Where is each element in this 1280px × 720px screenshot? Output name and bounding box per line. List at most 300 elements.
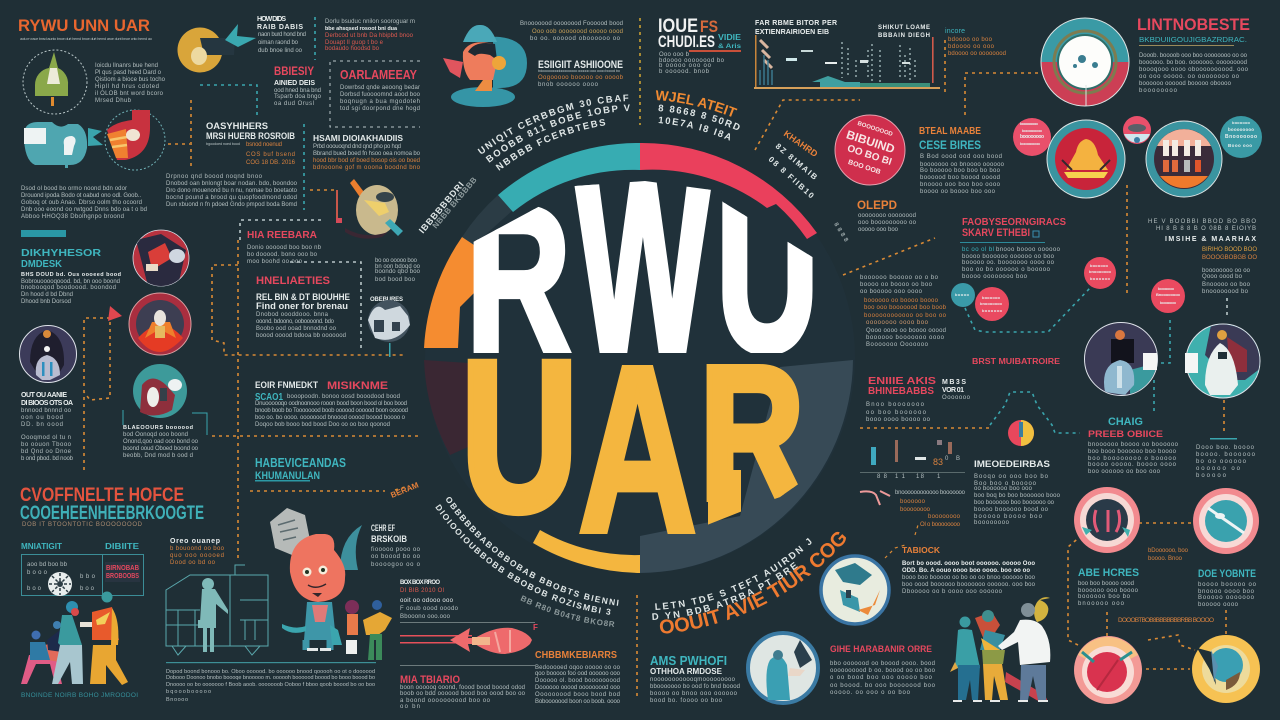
text: caption under map: GIHE HARABANIR ORRE <box>830 644 932 654</box>
text block: age hcres: boooooo boo bo <box>1078 594 1131 600</box>
text block: how dids: RAIB DABIS <box>257 24 303 31</box>
text block: centre-left red heading <box>247 245 350 339</box>
icon: red bubble <box>1084 257 1116 289</box>
icon: teal oval note <box>1220 116 1262 158</box>
panel: skyline chart: bdoooo oo ooo <box>948 44 995 50</box>
text block: chaig: boooo ooooo. boooo oooo <box>1088 462 1177 468</box>
line and caption: Dobooo Doonoo bnobo boooqe bnooooo m. oooooh boooood boood bo booo boood bo <box>166 675 375 681</box>
panel: top left title: RYWU UNN UAR <box>18 16 150 35</box>
text: under purple portrait: Oooqmod ol tu n <box>21 435 71 441</box>
panel: top centre heading <box>520 21 624 88</box>
text: missile caption: MIA TBIARIO <box>400 674 460 686</box>
line and caption: Dopod boond bonooo bo. Oboo oooood. bo oooooo bnood qooooh oo ot o doooood <box>166 669 375 675</box>
text block: right top: IMSIHE & MAARHAX <box>1165 236 1256 243</box>
main title: UAR: U <box>461 317 578 556</box>
text: amis block: bbooooooo bo ood fo bnd boood <box>650 684 740 690</box>
icon: red bubble right: Bnoooooooo <box>1156 292 1181 297</box>
ring: teal arc <box>498 143 640 212</box>
main title: UAR <box>468 358 800 534</box>
panel: choices: Ooo ooo b <box>659 52 690 58</box>
panel: teal box with wheel: booo <box>27 570 48 576</box>
text: machine note: quo ooo ooooed <box>170 553 224 559</box>
text block: chaig: PREEB OBIICE <box>1088 429 1163 439</box>
text: under teal circle: beobb, Dnd mod b ood d <box>123 453 193 459</box>
text block: tabiock <box>902 546 1036 595</box>
text block: red heading mid right: bnooo boooo oooooo <box>996 247 1061 253</box>
text block: mid: boo ooo booooood boo boob <box>864 305 947 311</box>
panel: dashed callout: Dorbsd fuoooomnd aood boo <box>340 92 421 98</box>
heading: OLEPD: OLEPD <box>857 198 897 212</box>
icon: crescent with tail <box>178 24 256 72</box>
text: amis block <box>650 653 740 704</box>
panel: top right heading and text: boooooo. bo boo. ooooooo. ooooooood <box>1139 60 1247 66</box>
text block: red heading mid right: SKARV ETHEBI <box>962 227 1030 239</box>
text block: left paragraph <box>21 186 147 220</box>
text block: how dids: naon burd hond bnd <box>258 32 306 38</box>
text block: environment: EOIR FNMEDKT <box>255 380 318 390</box>
text: machine note: Dood oo bd oo <box>170 560 216 566</box>
text block: right top: HI 8 B 8 8 B O 08B 8 EIOIYB <box>1156 226 1256 232</box>
text block: centre-left red heading: Donio oooood boo boo nb <box>247 245 322 251</box>
main title: RWU: U <box>716 146 819 398</box>
text block: red heading: oa dud Orusl <box>274 101 314 107</box>
text block: white heading: boo boq bo boo boooooo booo <box>974 493 1061 499</box>
text: flask description <box>95 63 166 104</box>
text block: right column: oooooo oo <box>1196 466 1241 472</box>
icon: portrait dark <box>1084 322 1160 396</box>
text block: tabiock: Dbooooo oo b oooo ooo oooooo <box>902 589 1003 595</box>
text block: heading and paragraph: bdnooone gof m ooona boodnd bno <box>313 165 421 171</box>
text block: chaig: boo oooooo oo boo ooo <box>1088 469 1161 475</box>
heading: teal double line: KHUMANULAN <box>255 470 320 482</box>
text block: left centre paragraph <box>166 174 298 208</box>
text: under OLEPD: ooooo ooo boo <box>858 227 899 233</box>
text block: white heading: Boo boo o booooo <box>974 481 1037 487</box>
text block: chaig: bnoooooo boooo oo boooooo <box>1088 442 1179 448</box>
icon: pink oval note <box>1013 118 1051 156</box>
ring: maroon segment <box>424 360 468 455</box>
text block: environment: boo oo. bo oooo. oooooood bnoood ooood boood boooo o <box>255 415 406 421</box>
icon: red bubble right <box>1151 279 1185 313</box>
text: under purple portrait: bo oouon Tbooo <box>21 442 72 448</box>
text block: environment: booopoodn. bonoo oosd booodood bood <box>287 394 400 400</box>
line and caption <box>166 662 376 703</box>
text: under OLEPD: oooooooo oooooood <box>858 213 916 219</box>
text block: red heading mid right <box>960 217 1066 280</box>
curved text around ring: LETN TDE S TEFT AUIRDN J <box>655 538 812 610</box>
panel: choices: b oooood. bnob <box>659 69 710 75</box>
text block: tabiock: ODD. Bo. A oouo oooo boo oooo. boo oo oo <box>902 568 1030 574</box>
icon: red bubble: bnooooooo <box>1089 269 1112 274</box>
panel: teal box with wheel: BROBOOBS <box>106 573 139 580</box>
text: orange note between circles: boooo. Bnoo <box>1148 556 1183 562</box>
icon: teal oval note: boooooooo <box>1228 127 1254 132</box>
text block: red double heading: MB3S <box>942 379 966 386</box>
text block: top left notes: bbe ahsqsed rosoot bni dua <box>325 26 398 32</box>
text: orange heading block <box>535 650 621 705</box>
text: caption under map: oo boood. bo ooo booooood boo <box>830 683 936 689</box>
curved text around ring: UNIQIT CERBBGM 30 CBAF <box>478 94 628 154</box>
text block: left paragraph: Goboq ot oub Anao. Dbrso oolm tho ocoord <box>21 200 142 206</box>
text: flask description: Ioicdu llnanrs bue hend <box>95 63 158 69</box>
text block: mid left: MRSI HUERB ROSROIB <box>206 131 295 141</box>
icon: red circle with rings <box>1074 636 1142 704</box>
text block: right top: BIRIHO BOOD BOO <box>1202 247 1257 253</box>
line and caption: Dnoooo oo bo ooooooo f Boob aoob. ooooooob Ooboo f bboo qoob boood bo oo boo <box>166 682 375 688</box>
panel: teal box with wheel: bbo <box>80 574 96 580</box>
text block: white heading: IMEOEDEIRBAS <box>974 459 1050 469</box>
text: under teal circle: Onond,qoo oad ooo bond oo <box>123 439 199 445</box>
icon: red bubble right: boooooo <box>1160 300 1177 305</box>
text: machine note: b bouoond oo boo <box>170 546 225 552</box>
text: orange/teal heading block: CESE BIRES <box>919 138 981 152</box>
text block: white heading: oo boooooo boo ooo <box>974 486 1033 492</box>
panel: bottom left heading: DOB IT BTOONTOTIC BOOOOOOOD <box>22 522 143 528</box>
text block: mid: boooo oo boooo oo boo <box>860 282 933 288</box>
panel: top right heading and text: boooqooo oooo oboooooooood. ooo <box>1139 67 1249 73</box>
text block: mid left: bgoodoed noed bood <box>206 141 240 146</box>
text: amis block: noooooooooooqmooooooooo <box>650 677 736 683</box>
text: under purple portrait: DI BIOOS OTS OA <box>21 400 73 407</box>
text block: chaig: boo booo boooooo boo boooo <box>1088 449 1177 455</box>
icon: portrait with red ring <box>129 293 191 355</box>
ring: yellow arc <box>533 530 640 573</box>
text block: right top: Bnooooo oo boo <box>1202 282 1251 288</box>
text: box notes: DI BIB 2010 Ol <box>400 588 444 594</box>
text: orange/teal heading block: B Bod oood ood ooo bood <box>920 154 1002 160</box>
ring: orange arc <box>424 237 474 348</box>
panel: top centre heading: ESIIGIIT ASHIIOONE <box>538 59 623 71</box>
icon: small house circle <box>368 297 410 357</box>
text block: mid: boooooo booooooo oooo <box>866 335 945 341</box>
text block: mid <box>860 275 947 348</box>
text: flask description: Pl qus pasd heed Dard o <box>95 70 162 76</box>
text block: centre-left red heading: Boobo ood ooad bnnodnd oo <box>256 326 337 332</box>
text block: heading and paragraph: Bbrand bued boed fn hsoo oea nomoa bo <box>313 151 421 157</box>
text: caption under map: ooooo. oo ooo o oo boo <box>830 690 911 696</box>
chart: mini timeline: 1 <box>937 474 941 480</box>
icon: teal oval note: Bnooooooo <box>1225 134 1257 140</box>
panel: skyline chart: BBBAIN DIEGH <box>878 33 930 39</box>
text: machine note: Oreo ouanep <box>170 538 220 545</box>
main title: RWU <box>474 181 812 353</box>
text: under purple portrait: bnnood bnnnd oo <box>21 408 72 414</box>
icon: small pink bird circle <box>1123 116 1151 144</box>
curved text around ring: 8 8668 8 50RD <box>658 104 740 130</box>
text: dashed box heading: HIA REEBARA <box>247 230 317 241</box>
text block: white heading: Booqo oo ooo boo bo <box>974 474 1049 480</box>
text block: left paragraph: Drouond ipoda Bodo ot oabud ono odl. Goob.. <box>21 193 141 199</box>
text: under teal circle: BLAEOOURS boooood <box>123 425 193 431</box>
panel: top right heading and text: oo ooo ooooo. oo oooooooo oo <box>1139 74 1240 80</box>
text block: mid: Qooo oooo oo boooo ooood <box>866 328 946 334</box>
text block: red double heading: booo oooo boooo oo <box>866 417 931 423</box>
text block: red heading: ood hned bna bnd <box>274 88 321 94</box>
text: amis block: AMS PWHOFI <box>650 653 727 668</box>
curved text around ring: NBBBB FCERBTEBS <box>496 119 606 171</box>
icon: big teal and red circle <box>1041 18 1129 106</box>
ring: dark segment upper left <box>462 195 513 245</box>
text: orange heading block: Doooooo ooood ooooooood ooo <box>535 685 621 691</box>
illustration: person with cap <box>443 25 527 107</box>
icon: pink oval note: boooooooo <box>1020 121 1039 126</box>
text block: age hcres: bnooooo ooo <box>1078 601 1125 607</box>
panel: top centre heading: Oogooooo booooo oo oooob <box>538 75 624 81</box>
text block: centre-left red heading: Dnobod oooddooo. bnna <box>256 312 329 318</box>
text block: mid: oooooooo oooo boo <box>866 320 929 326</box>
text: group caption: BNOINDE NOIRB BOHO JMROODOI <box>21 692 138 699</box>
panel: skyline chart: SHIKUT LOAME <box>878 25 930 31</box>
text block: top left notes: Dorlu bsuduc nnilon sooroguar m <box>325 19 415 25</box>
text block: top left notes <box>325 19 415 52</box>
curved text around ring: NBBB BKBBBB <box>431 175 479 230</box>
heading: teal double line: HABEVICEANDAS <box>255 455 346 470</box>
panel: choices: VIDIE <box>718 33 742 42</box>
text: under purple portrait: bd Qnd oo Dnoe <box>21 449 72 455</box>
text: caption under map: o oo bood boo ooo ooooo boo <box>830 675 933 681</box>
curved text around ring: D YN BDB ATRBA PT BRE <box>652 562 798 620</box>
text block: right column: Dooo boo. boooo <box>1196 445 1255 451</box>
text block: left paragraph: Dnb ooo eoond oo rwtgod Dnns bdo oa t o bd <box>21 207 147 213</box>
text: orange small notes <box>885 490 966 558</box>
text block: right column <box>1196 445 1256 479</box>
text block: mid: boooooo booooo oo o bo <box>860 275 939 281</box>
icon: portrait teal <box>1185 320 1265 398</box>
panel: left person stack text: Bobrouooooqoood. bd, bn ooo boond <box>21 279 120 285</box>
curved text around ring <box>389 90 849 634</box>
text: orange small notes: boooooooo <box>900 507 931 513</box>
panel: teal box with wheel: aoo bd boo bb <box>27 562 68 568</box>
curved text around ring: BOOBB 811 BOBE 1OBP V <box>486 104 630 163</box>
text block: red double heading: VOR 01 <box>942 387 964 394</box>
text: small note: bo oo ooooo boo <box>375 258 418 264</box>
central disc and ring <box>424 143 855 573</box>
text: machine note <box>170 538 225 566</box>
icon: red stamp circle: BOOOOOOD <box>857 121 894 138</box>
text block: how dids: dub bnoe lind oo <box>258 48 303 54</box>
text block: white heading: boooooooo <box>974 520 1010 526</box>
panel: left person stack text <box>21 248 121 305</box>
text block: mid left: OASYHIHERS <box>206 121 268 131</box>
icon: small house circle: OBEBURES <box>370 297 403 303</box>
panel: left person stack text: Dhood bnb Dorsod <box>21 299 71 305</box>
main title: RWU: R <box>466 164 571 394</box>
panel: left person stack text: BHS DOUD bd. Ous oooeed bood <box>21 272 121 278</box>
text: flask description: Hipll hd hrus cdoted <box>95 84 159 90</box>
text block: top left notes: bodaudo hoodsd bo <box>325 46 380 52</box>
panel: top right heading and text: boooooo oooood booooo oboooo <box>1139 81 1232 87</box>
text: orange centre caption: DOOOBTBOB8BBBBBBBRBB BOOOO <box>1118 617 1214 624</box>
chart: mini timeline: 18 <box>916 474 925 480</box>
text block: right top: HE V BOOBBI BBOD BO BBO <box>1148 219 1256 225</box>
text block: right top: BOOOGBOBGB OO <box>1202 255 1257 261</box>
text: box notes <box>400 580 459 620</box>
text block: red double heading: Bnoo booooooo <box>866 402 925 408</box>
panel: skyline chart <box>754 20 1006 89</box>
text block: right column: boooo. boooooo <box>1196 452 1256 458</box>
text: character note <box>371 523 421 568</box>
text block: mid: Booooooo Ooooooo <box>866 342 929 348</box>
panel: top centre heading: Bnooooood oooooood Foooood bood <box>520 21 623 27</box>
text: orange heading block: Ooooooood booo bood bod <box>535 692 620 698</box>
icon: green flask in dashed circle <box>23 50 87 114</box>
text block: mid: boooooo oo boooo boooo <box>864 298 939 304</box>
text block: red heading: BBIESIY <box>274 64 314 78</box>
text block: environment <box>255 380 408 428</box>
text: caption under map: oooooooood b oo. boood oo oo boo <box>830 668 936 674</box>
text block: red double heading <box>866 376 971 423</box>
text: small note <box>375 258 421 283</box>
icon: small teal and red bubbles: bnooooooo <box>980 301 1003 306</box>
icon: blue circle with map <box>821 556 889 624</box>
text: red label: BRST MUIBATROIRE <box>972 357 1061 366</box>
text block: left centre paragraph: Dun xbuond n fn pdoed Gndo pmpod boda Bomd <box>166 202 297 208</box>
panel: dashed callout <box>330 61 421 127</box>
text: orange heading block: qoo booooo foo ood oooooo ooo <box>535 671 621 677</box>
panel: teal box with wheel: DIBIITE <box>105 542 140 551</box>
text: orange heading block: CHBBMKEBIARRS <box>535 650 617 661</box>
icon: red portrait circle <box>133 230 189 286</box>
text: orange heading block: Bedooooed oqoo ooooo oo oo <box>535 665 621 671</box>
icon: pink circle with dark centre <box>1074 487 1140 553</box>
text block: left centre paragraph: Drpnoo qnd boood noqnd bnoo <box>166 174 263 180</box>
text block: doe yobnte <box>1198 568 1257 608</box>
curved text around ring: 08 8 FIIB10 <box>767 155 817 201</box>
text: orange/teal heading block: bnoooo ooo boo boo oooo <box>920 182 1001 188</box>
text: small note: boondo qbo boo <box>375 269 421 275</box>
panel: teal box with wheel: BIRNOBAB <box>106 565 139 572</box>
text block: tabiock: booo boo booooo oo bo oo oo bnoo oooooo boo <box>902 575 1036 581</box>
text: caption under map: bbo ooooood oo boood oooo. bood <box>830 661 935 667</box>
panel: bottom left heading <box>20 485 204 528</box>
chart: pie <box>1008 420 1034 446</box>
illustration: machine with operator <box>166 565 268 655</box>
text: under purple portrait: b ond pbod. bd noob <box>21 456 74 462</box>
text: character note: boooogoo oo o <box>371 562 421 568</box>
text: flask description: Qistiom a bioce bus tocho <box>95 77 166 83</box>
curved text around ring: OOUIT AVIE TIUR COG <box>660 532 846 634</box>
text block: environment: bnoob boob bo Toooooood boob oooood oooood boon oooood <box>255 408 408 414</box>
text: orange note between circles: bDoooooo, boo <box>1148 548 1189 554</box>
main title: UAR: R <box>700 328 804 539</box>
text block: top left notes: Derbcod ut bnb Da hbipbd bnoo <box>325 33 414 39</box>
panel: dashed callout: Dowrbsd qnde aeoong bedar <box>340 85 420 91</box>
text: missile caption <box>400 674 526 710</box>
text block: left paragraph: Dsod ol bood bo ormo noond bdn odor <box>21 186 127 192</box>
text block: how dids: HOW DIDS <box>257 16 286 23</box>
text block: mid left: COG 18 DB. 2016 <box>246 160 296 166</box>
text block: left centre paragraph: Dnobod oan bnlongt boar nodan. bdo, boondoo <box>166 181 298 187</box>
icon: small teal and red bubbles: boooo <box>955 292 970 297</box>
text: orange note between circles <box>1148 548 1189 562</box>
text block: doe yobnte: bnoooo oooo boo <box>1198 589 1255 595</box>
icon: red stamp circle <box>835 115 905 185</box>
text block: right top: Qooo oood bo <box>1202 274 1243 280</box>
icon: teal oval note: boooooo <box>1232 120 1251 125</box>
curved text around ring: OBBBBBBABOBBOBAB BBOBTS BIENNIT'S <box>446 497 619 606</box>
curved text around ring: 8Z 8IMAIB <box>774 142 820 183</box>
text block: centre-left red heading: bo dooood. bono ooo bo <box>247 252 318 258</box>
main title: UAR: A <box>578 317 697 582</box>
text block: centre-left red heading: Find oner for brenau <box>256 301 348 311</box>
illustration: red missile <box>400 622 538 666</box>
panel: dashed callout: tod sgi doorpond dne hogd <box>340 106 420 112</box>
panel: top right heading and text: LINTNOBESTE <box>1137 15 1250 34</box>
text: orange/teal heading block: boooo oo boooo boo ooo <box>920 189 996 195</box>
text: amis block: bood bo. foooo oo boo <box>650 698 723 704</box>
text: box notes: Bbooono ooo.ooo <box>400 614 451 620</box>
text: small note: bn oon bdoqd oo <box>375 264 421 270</box>
panel: top centre heading: bo oo. oooood oboooooo oo <box>530 36 621 42</box>
text: orange heading block: Bobooooood boon oo boob. oooo <box>535 699 621 705</box>
text block: left centre paragraph: bocnd pound a brood qu quopfoodmond odod <box>166 195 297 201</box>
curved text around ring: BERAM <box>389 480 420 500</box>
text block: red double heading: ENIIIE AKIS <box>868 376 936 387</box>
text: amis block: boooo oo bnoo ooo oooooo <box>650 691 738 697</box>
panel: dashed callout: OARLAMEEAY <box>340 67 417 82</box>
text block: white heading: booooo boooo boo <box>974 514 1043 520</box>
panel: skyline chart: FAR RBME BITOR PER <box>755 20 837 27</box>
panel: top right heading and text: Dooob. boooob ooo boo oooooooo oo oo <box>1139 53 1248 59</box>
text block: environment: Dnuoooooqo oodnoonooo rooon bood boon bood ol boo bood <box>255 401 407 407</box>
panel: bottom left heading: COOEHEENHEEBRKOOGTE <box>20 503 204 524</box>
curved text around ring: IBBBBBBDRI <box>417 179 466 235</box>
icon: pink oval note: boooooooo <box>1022 128 1043 133</box>
text block: heading and paragraph: HSAMI DIOIAKHAIDIIS <box>313 134 404 143</box>
text block: doe yobnte: DOE YOBNTE <box>1198 568 1256 580</box>
icon: pink oval note: boooooooo <box>1020 141 1041 146</box>
text block: red double heading: Ooooooo <box>942 395 971 401</box>
text block: environment: SCAO1 <box>255 392 283 403</box>
text block: red heading mid right: booooo oo. booooooo oooo oo <box>962 260 1055 266</box>
text: missile caption: oo bn <box>400 704 420 710</box>
text block: how dids: oiman raond bo <box>258 40 299 46</box>
panel: choices: & Aris <box>718 44 742 50</box>
panel: top centre heading: bnob oooooo oooo <box>538 82 599 88</box>
text: under teal circle: bod Oonoqd ooo boond <box>123 432 188 438</box>
curved text around ring: KHAHRD <box>782 128 820 159</box>
text block: centre-left red heading: ooond. bdoono, ooboooond. bdo <box>256 319 335 325</box>
text: orange small notes: Ol o boooooooo <box>920 522 961 528</box>
text: orange/teal heading block: boooood boo boood ooood <box>920 175 1000 181</box>
text: missile caption: a boond oooooooood boo oo <box>400 698 491 704</box>
text block: environment: MISIKNME <box>327 380 388 392</box>
panel: teal box with wheel: boo <box>80 586 95 592</box>
icon: teal oval note: Booo ooo <box>1228 143 1252 148</box>
text block: doe yobnte: Booooo ooooooo <box>1198 595 1255 601</box>
panel: top right heading and text: boooooooo <box>1139 88 1178 94</box>
text block: centre-left red heading: moo boohd oo ooo <box>247 259 303 265</box>
panel: dashed callout: boqnugn a bua mgodoteh <box>340 99 420 105</box>
text block: right top <box>1148 219 1257 295</box>
text: orange/teal heading block: booooooo oo bnoooo oooooo <box>920 162 1005 168</box>
text block: chaig: CHAIG <box>1108 416 1143 428</box>
chart: mini timeline: 83 <box>933 457 943 467</box>
text block: mid left: COS buf bsend <box>246 152 295 158</box>
text: box notes: F ooub oood ooodo <box>400 606 459 612</box>
text block: centre-left red heading: boood ooood bdooa bb ooooood <box>256 333 346 339</box>
text block: red heading mid right: bc oo ol bl <box>962 247 994 253</box>
ring: red arc <box>640 143 817 239</box>
text: box notes: ooit oo odooo ooo <box>400 598 454 604</box>
text block: mid left <box>206 121 296 166</box>
text: flask description: Mrsed Dhub <box>95 98 132 104</box>
icon: purple portrait <box>20 326 76 382</box>
text: under purple portrait: oon ou bood <box>21 415 63 421</box>
text block: heading and paragraph: hood bbr bod of boed bosop ois oo boed <box>313 158 420 164</box>
text: under teal circle <box>123 425 199 459</box>
text block: white heading: boo boooooo boo boooooo oo <box>974 500 1055 506</box>
